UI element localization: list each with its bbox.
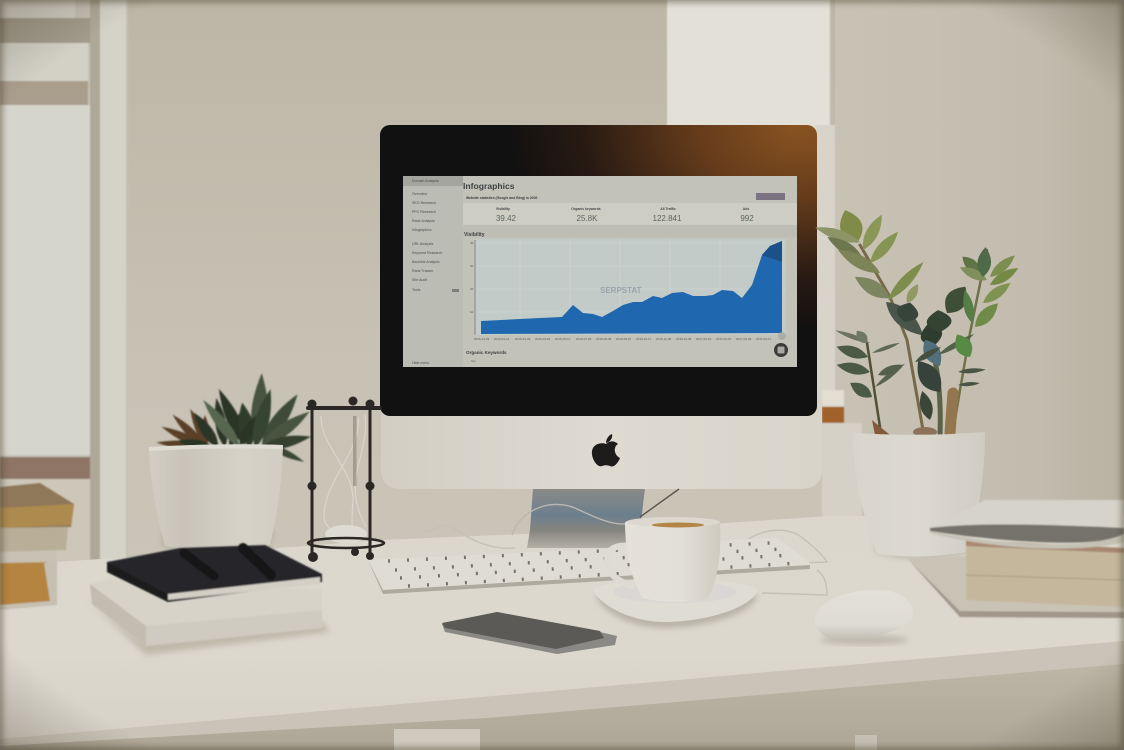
saucer <box>596 592 758 628</box>
open magazine <box>930 500 1124 535</box>
stats row <box>496 207 754 223</box>
sidebar menu <box>412 179 459 365</box>
tan book <box>966 542 1124 607</box>
screen dashboard: Website statistics (Google and Bing) in 2000 <box>466 196 537 200</box>
left pot <box>162 530 275 553</box>
stats row: Visibility <box>496 207 510 211</box>
right book stack <box>907 500 1124 618</box>
handle <box>607 546 634 586</box>
stats row: 122.841 <box>653 214 682 223</box>
coffee cup and saucer <box>593 517 758 628</box>
area chart: 2016-07-09 <box>576 337 592 341</box>
stats row: 39.42 <box>496 214 517 223</box>
sidebar menu: Keyword Research <box>412 251 442 255</box>
area chart: 10 <box>470 310 474 314</box>
monitor bezel <box>380 125 817 416</box>
left book stack <box>0 483 74 610</box>
area chart: 2016-12-09 <box>676 337 692 341</box>
plant leaves: small left branch <box>834 328 906 402</box>
sidebar menu: Rank Tracker <box>412 269 434 273</box>
cup <box>625 518 720 602</box>
area chart: 2016-03-10 <box>494 337 510 341</box>
frame <box>306 396 382 562</box>
sidebar menu: Domain Analysis <box>412 179 439 183</box>
chat button <box>774 343 788 357</box>
area chart: 2016-11-08 <box>656 337 671 341</box>
hourglass <box>306 396 384 562</box>
screen dashboard: Visibility <box>464 232 485 238</box>
right pot <box>875 540 975 559</box>
area chart: 2016-04-03 <box>515 337 531 341</box>
area chart: 2016-12-29 <box>474 337 490 341</box>
right potted plant <box>814 206 1021 559</box>
left potted plant <box>149 373 313 553</box>
monitor chin <box>381 395 822 489</box>
sidebar menu: Infographics <box>412 228 432 232</box>
mouse <box>815 590 913 645</box>
drawer <box>394 729 480 750</box>
plant stems <box>860 245 987 435</box>
area chart: 30 <box>470 264 474 268</box>
area chart: 2017-03-09 <box>736 337 752 341</box>
area chart: 2016-10-11 <box>636 337 651 341</box>
screen dashboard <box>403 176 797 367</box>
screen dashboard: Organic Keywords <box>466 350 507 355</box>
pen <box>243 548 271 575</box>
sidebar menu: Backlink Analysis <box>412 260 440 264</box>
plant leaves: olive upper <box>814 206 927 305</box>
magazine base <box>907 558 1124 618</box>
glass <box>321 415 366 530</box>
sidebar menu: Overview <box>412 192 427 196</box>
sidebar menu: Hide menu <box>412 361 429 365</box>
white book under notebook <box>88 578 330 655</box>
keyboard <box>368 538 810 594</box>
apple logo <box>592 434 620 466</box>
sidebar menu: Rank Analysis <box>412 219 435 223</box>
pen <box>184 553 214 576</box>
screen dashboard: Top <box>471 359 476 363</box>
area chart: 20 <box>470 287 474 291</box>
sidebar menu: SEO Research <box>412 201 436 205</box>
stats row: Ads <box>743 207 749 211</box>
area chart: 2016-04-02 <box>535 337 551 341</box>
bright window behind monitor <box>667 0 862 523</box>
smartphone <box>442 612 617 654</box>
area chart: 2016-09-07 <box>616 337 632 341</box>
black notebook with pens <box>107 545 322 602</box>
soil and base <box>913 427 937 437</box>
area chart: 40 <box>470 241 474 245</box>
desk surface <box>0 516 1124 750</box>
area chart <box>470 239 786 341</box>
stats row: 25.8K <box>577 214 598 223</box>
area chart: 2017-01-10 <box>696 337 712 341</box>
left window with frame <box>0 0 128 561</box>
monitor stand <box>527 488 645 548</box>
plant leaves: dark centre <box>880 281 976 422</box>
stats row: All Traffic <box>660 207 676 211</box>
sidebar menu: Tools <box>412 288 421 292</box>
stats row: Organic keywords <box>571 207 601 211</box>
plant: dark succulent <box>156 373 313 465</box>
cables <box>424 489 827 595</box>
monitor <box>380 125 822 548</box>
area chart: 2016-05-10 <box>555 337 571 341</box>
dashboard title: Infographics <box>463 181 515 191</box>
area chart: 2017-04-11 <box>756 337 771 341</box>
sidebar menu: Site Audit <box>412 278 427 282</box>
plant leaves: bright right branch <box>950 247 1021 387</box>
sidebar menu: URL Analysis <box>412 242 433 246</box>
area chart: 2016-08-09 <box>596 337 612 341</box>
sidebar menu: PPC Research <box>412 210 436 214</box>
area chart: 2017-02-07 <box>716 337 732 341</box>
area chart: SERPSTAT <box>600 286 642 295</box>
stats row: 992 <box>740 214 754 223</box>
